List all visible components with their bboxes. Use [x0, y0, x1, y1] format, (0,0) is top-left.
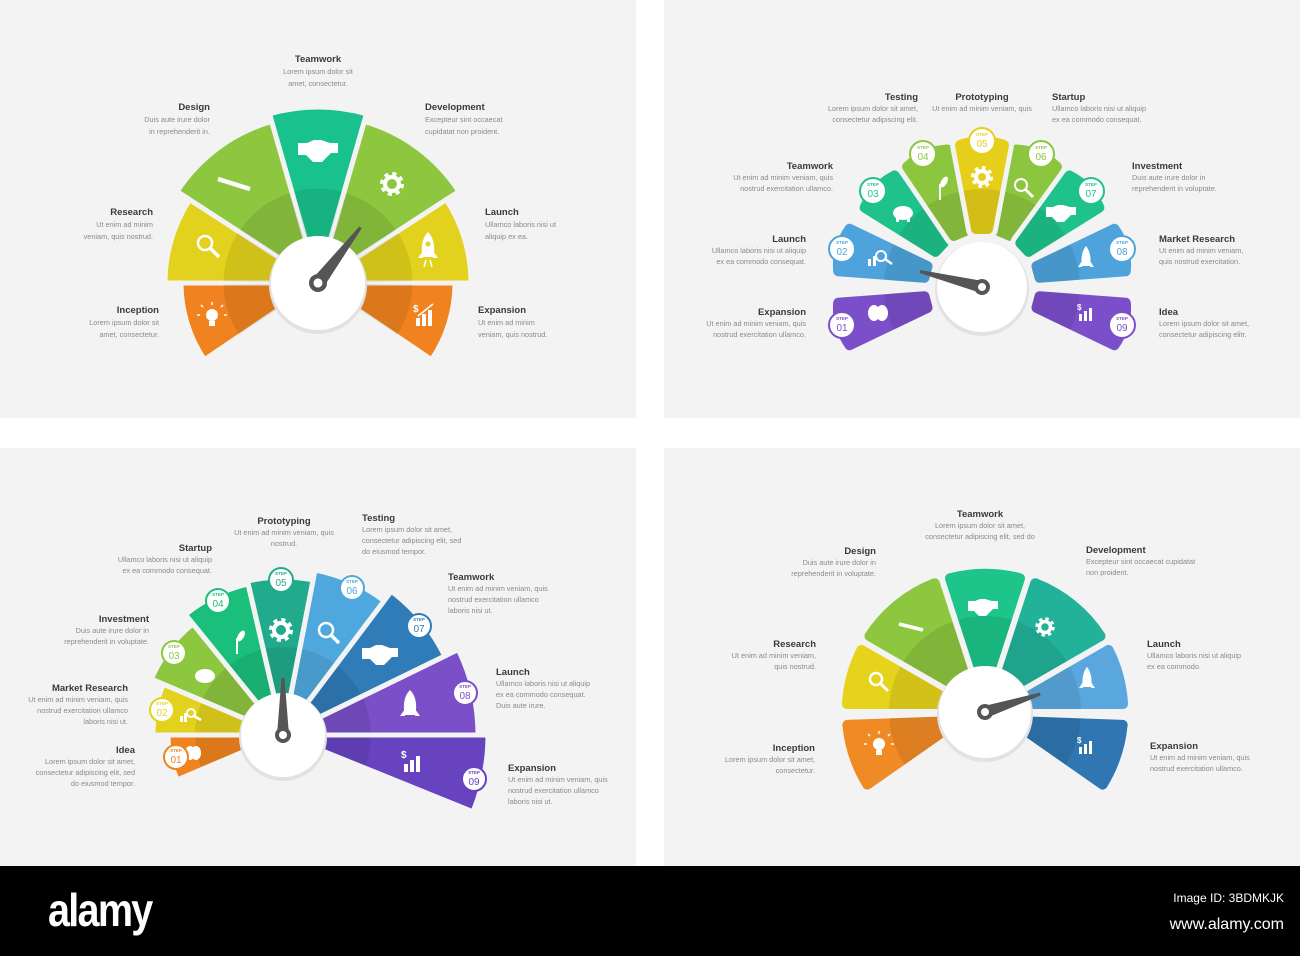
- text: teamwork: Teamwork: [448, 572, 495, 583]
- step badges panel 2: 06: [1035, 152, 1047, 163]
- rounded segments panel 4: [844, 574, 1126, 786]
- text: research: quis nostrud.: [774, 662, 816, 671]
- panel: top-left gauge: [0, 0, 636, 418]
- text: inception: consectetur.: [776, 766, 815, 775]
- text: launch: [485, 207, 556, 241]
- text: market research: Ut enim ad minim veniam, quis: [28, 695, 128, 704]
- text: expansion: [508, 763, 608, 806]
- text: launch: [496, 667, 590, 710]
- step badges panel 3: 05: [275, 578, 287, 589]
- text: idea: consectetur adipiscing elit, sed: [36, 768, 135, 777]
- step badges panel 2: 02: [836, 247, 848, 258]
- hub panel 3: [239, 693, 327, 781]
- icons panel 4: [864, 599, 1095, 755]
- needle panel 3: [275, 678, 291, 743]
- text: research: veniam, quis nostrud.: [84, 232, 153, 241]
- icon: rocket: [400, 690, 420, 716]
- text: testing: consectetur adipiscing elit.: [832, 115, 918, 124]
- text: expansion: Ut enim ad minim veniam, quis: [706, 319, 806, 328]
- text: teamwork: [925, 509, 1035, 541]
- icon: rocket: [418, 232, 438, 267]
- icons panel 3: [180, 620, 420, 772]
- text: expansion: Expansion: [508, 763, 556, 774]
- text: testing: do eiusmod tempor.: [362, 547, 426, 556]
- text: development: cupidatat non proident.: [425, 127, 499, 136]
- text: launch: Duis aute irure.: [496, 701, 545, 710]
- text: prototyping: Prototyping: [955, 92, 1009, 103]
- text: expansion: [1150, 741, 1250, 773]
- icon: pencil: [899, 624, 923, 630]
- step badges panel 3: STEP: [212, 592, 224, 597]
- footer bar: [0, 866, 1300, 956]
- needle panel 4: [975, 686, 1043, 722]
- text: idea: Lorem ipsum dolor sit amet,: [1159, 319, 1249, 328]
- text: development: Development: [425, 102, 485, 113]
- text: research: [84, 207, 153, 241]
- text: launch: [1147, 639, 1241, 671]
- text: design: Duis aute irure dolor in: [803, 558, 876, 567]
- text: startup: Ullamco laboris nisi ut aliquip: [1052, 104, 1146, 113]
- step badges panel 3: 09: [468, 777, 480, 788]
- text: inception: Inception: [773, 743, 815, 754]
- step badges panel 2: STEP: [867, 182, 879, 187]
- text: prototyping: Prototyping: [257, 516, 311, 527]
- text: teamwork: Teamwork: [295, 54, 342, 65]
- text: research: Research: [773, 639, 816, 650]
- step badges panel 2: 03: [867, 189, 879, 200]
- step badges panel 2: STEP: [1035, 145, 1047, 150]
- text: market research: Ut enim ad minim veniam,: [1159, 246, 1243, 255]
- step badges panel 2: [829, 128, 1135, 338]
- text: expansion: Expansion: [478, 305, 526, 316]
- text: testing: [828, 92, 918, 124]
- icon: brain: [868, 305, 888, 321]
- panel: top-right petals: [664, 0, 1300, 418]
- icon: bulb: [864, 731, 894, 755]
- text: launch: Ullamco laboris nisi ut aliquip: [1147, 651, 1241, 660]
- text: teamwork: nostrud exercitation ullamco.: [740, 184, 833, 193]
- text: startup: Ullamco laboris nisi ut aliquip: [118, 555, 212, 564]
- text: startup: Startup: [179, 543, 212, 554]
- step badges panel 3: 01: [170, 755, 182, 766]
- icon: chart: [1077, 303, 1092, 321]
- text: expansion: Expansion: [1150, 741, 1198, 752]
- text: development: [1086, 545, 1195, 577]
- icon: rocket: [1079, 667, 1095, 688]
- text: expansion: nostrud exercitation ullamco: [508, 786, 599, 795]
- step badges panel 2: STEP: [836, 316, 848, 321]
- icons panel 2: [868, 168, 1094, 321]
- text: startup: [118, 543, 212, 575]
- text: testing: [362, 513, 461, 556]
- step badges panel 3: STEP: [168, 644, 180, 649]
- icon: magnifier: [198, 236, 219, 257]
- text: design: Design: [178, 102, 210, 113]
- step badges panel 2: STEP: [836, 240, 848, 245]
- icon: rocket: [1078, 246, 1094, 267]
- text: prototyping: Ut enim ad minim veniam, quis: [932, 104, 1032, 113]
- text: idea: do eiusmod tempor.: [71, 779, 135, 788]
- text: launch: Ullamco laboris nisi ut: [485, 220, 556, 229]
- step badges panel 2: 07: [1085, 189, 1097, 200]
- text: market research: laboris nisi ut.: [83, 717, 128, 726]
- hub panel 2: [935, 242, 1029, 336]
- text: teamwork: Lorem ipsum dolor sit amet,: [935, 521, 1025, 530]
- text: development: [425, 102, 502, 136]
- text: launch: ex ea commodo.: [1147, 662, 1201, 671]
- text: investment: [64, 614, 150, 646]
- step badges panel 3: 02: [156, 708, 168, 719]
- text: testing: Testing: [362, 513, 395, 524]
- step badges panel 3: STEP: [275, 571, 287, 576]
- step badges panel 3: STEP: [346, 579, 358, 584]
- text: expansion: nostrud exercitation ullamco.: [1150, 764, 1243, 773]
- step badges panel 3: 06: [346, 586, 358, 597]
- text: prototyping: nostrud.: [271, 539, 297, 548]
- text: idea: Lorem ipsum dolor sit amet,: [45, 757, 135, 766]
- icon: handshake: [1046, 205, 1076, 222]
- needle panel 2: [918, 264, 992, 297]
- text: startup: ex ea commodo consequat.: [122, 566, 212, 575]
- text: testing: Testing: [885, 92, 918, 103]
- text: market research: Market Research: [1159, 234, 1235, 245]
- text: teamwork: Teamwork: [787, 161, 834, 172]
- icon: magnifier check: [1015, 179, 1033, 197]
- text: investment: [1132, 161, 1217, 193]
- text: launch: Ullamco laboris nisi ut aliquip: [712, 246, 806, 255]
- icon: handshake: [298, 140, 338, 162]
- icon: brain: [185, 746, 201, 760]
- text: launch: ex ea commodo consequat.: [716, 257, 806, 266]
- text: research: [732, 639, 816, 671]
- step badges panel 3: 07: [413, 624, 425, 635]
- icon: bulb: [197, 302, 227, 326]
- text: market research: [28, 683, 128, 726]
- icon: market research: [868, 251, 892, 266]
- fan segments panel 3: [148, 566, 492, 812]
- step badges panel 3: STEP: [459, 684, 471, 689]
- text: website: www.alamy.com: [1169, 916, 1284, 933]
- text: investment: reprehenderit in voluptate.: [1132, 184, 1217, 193]
- step badges panel 2: STEP: [976, 132, 988, 137]
- needle panel 1: [305, 222, 368, 296]
- step badges panel 2: 09: [1116, 323, 1128, 334]
- icon: chart: [401, 750, 420, 772]
- text: development: non proident.: [1086, 568, 1129, 577]
- icon: gear: [382, 174, 402, 194]
- text: prototyping: Ut enim ad minim veniam, quis: [234, 528, 334, 537]
- text: launch: Launch: [485, 207, 519, 218]
- text: design: [144, 102, 211, 136]
- icon: chart: [1077, 736, 1092, 754]
- text: market research: [1159, 234, 1243, 266]
- text: expansion: nostrud exercitation ullamco.: [713, 330, 806, 339]
- text: investment: Duis aute irure dolor in: [1132, 173, 1205, 182]
- text: launch: Launch: [496, 667, 530, 678]
- text: testing: Lorem ipsum dolor sit amet,: [828, 104, 918, 113]
- text: testing: Lorem ipsum dolor sit amet,: [362, 525, 452, 534]
- step badges panel 2: STEP: [1116, 240, 1128, 245]
- text: teamwork: Ut enim ad minim veniam, quis: [733, 173, 833, 182]
- icon: handshake: [362, 645, 398, 665]
- text: design: reprehenderit in voluptate.: [791, 569, 876, 578]
- text: teamwork: Ut enim ad minim veniam, quis: [448, 584, 548, 593]
- icon: magnifier: [870, 673, 888, 691]
- text: testing: consectetur adipiscing elit, sed: [362, 536, 461, 545]
- text: design: in reprehenderit in.: [149, 127, 210, 136]
- text: idea: [1159, 307, 1249, 339]
- icon: gear: [973, 168, 991, 186]
- text: market research: nostrud exercitation ullamco: [37, 706, 128, 715]
- text: launch: aliquip ex ea.: [485, 232, 528, 241]
- text: market research: Market Research: [52, 683, 128, 694]
- step badges panel 2: 01: [836, 323, 848, 334]
- text: design: Design: [844, 546, 876, 557]
- icon: gear: [271, 620, 291, 640]
- step badges panel 3: STEP: [468, 770, 480, 775]
- text: idea: Idea: [1159, 307, 1179, 318]
- step badges panel 2: 05: [976, 139, 988, 150]
- panel: bottom-left fan: [0, 448, 636, 866]
- text: startup: Startup: [1052, 92, 1085, 103]
- text: launch: Launch: [1147, 639, 1181, 650]
- icon: chart: $: [401, 750, 407, 761]
- icon: pencil: [218, 179, 250, 189]
- text: startup: ex ea commodo consequat.: [1052, 115, 1142, 124]
- text: teamwork: [283, 54, 353, 88]
- gauge segments panel 1: [159, 107, 477, 361]
- icon: plant: [938, 175, 950, 200]
- step badges panel 2: STEP: [1116, 316, 1128, 321]
- text: expansion: [706, 307, 806, 339]
- icon: chart: $: [413, 304, 419, 315]
- text: investment: Investment: [1132, 161, 1183, 172]
- text: development: Excepteur sint occaecat cupidatat: [1086, 557, 1195, 566]
- step badges panel 3: STEP: [170, 748, 182, 753]
- text: inception: Lorem ipsum dolor sit: [89, 318, 159, 327]
- text: research: Research: [110, 207, 153, 218]
- step badges panel 3: 08: [459, 691, 471, 702]
- text: teamwork: amet, consectetur.: [288, 79, 348, 88]
- text: research: Ut enim ad minim: [96, 220, 153, 229]
- hub panel 4: [937, 666, 1033, 762]
- text: investment: Investment: [99, 614, 150, 625]
- text: investment: reprehenderit in voluptate.: [64, 637, 149, 646]
- step badges panel 2: STEP: [917, 145, 929, 150]
- petals panel 2: [834, 141, 1130, 346]
- text: development: Development: [1086, 545, 1146, 556]
- text: development: Excepteur sint occaecat: [425, 115, 502, 124]
- text: launch: ex ea commodo consequat.: [496, 690, 586, 699]
- text: launch: [712, 234, 806, 266]
- step badges panel 3: 03: [168, 651, 180, 662]
- text: expansion: [478, 305, 547, 339]
- icon: piggy: [195, 669, 215, 683]
- text: teamwork: nostrud exercitation ullamco: [448, 595, 539, 604]
- panel: bottom-right rounded gauge: [664, 448, 1300, 866]
- text: startup: [1052, 92, 1146, 124]
- text: image id: Image ID: 3BDMKJK: [1173, 891, 1284, 905]
- text: investment: Duis aute irure dolor in: [76, 626, 149, 635]
- icon: handshake: [968, 599, 998, 616]
- text: research: Ut enim ad minim veniam,: [732, 651, 816, 660]
- step badges panel 2: 08: [1116, 247, 1128, 258]
- text: teamwork: Teamwork: [957, 509, 1004, 520]
- step badges panel 3: [150, 568, 486, 791]
- text: expansion: Ut enim ad minim veniam, quis: [508, 775, 608, 784]
- icon: plant: [235, 629, 247, 654]
- icon: chart: $: [1077, 303, 1082, 312]
- text: idea: Idea: [116, 745, 136, 756]
- step badges panel 2: STEP: [1085, 182, 1097, 187]
- text: idea: consectetur adipiscing elitr.: [1159, 330, 1247, 339]
- step badges panel 3: 04: [212, 599, 224, 610]
- text: expansion: Ut enim ad minim: [478, 318, 535, 327]
- icon: market research: [180, 709, 201, 722]
- text: launch: Launch: [772, 234, 806, 245]
- icon: gear: [1037, 619, 1053, 635]
- text: inception: Inception: [117, 305, 159, 316]
- text: prototyping: [932, 92, 1032, 113]
- text: inception: [725, 743, 815, 775]
- text: teamwork: laboris nisi ut.: [448, 606, 493, 615]
- text: design: [791, 546, 876, 578]
- hub panel 1: [269, 236, 367, 334]
- icon: magnifier check: [319, 623, 339, 643]
- icon: piggy: [893, 206, 913, 222]
- step badges panel 2: 04: [917, 152, 929, 163]
- text: teamwork: [733, 161, 834, 193]
- text: expansion: laboris nisi ut.: [508, 797, 553, 806]
- text: expansion: veniam, quis nostrud.: [478, 330, 547, 339]
- step badges panel 3: STEP: [413, 617, 425, 622]
- text: teamwork: Lorem ipsum dolor sit: [283, 67, 353, 76]
- logo: alamy: alamy: [48, 885, 153, 937]
- text: inception: [89, 305, 159, 339]
- text: teamwork: [448, 572, 548, 615]
- text: market research: quis nostrud exercitation.: [1159, 257, 1240, 266]
- icon: chart: $: [1077, 736, 1082, 745]
- text: design: Duis aute irure dolor: [144, 115, 211, 124]
- text: prototyping: [234, 516, 334, 548]
- text: launch: Ullamco laboris nisi ut aliquip: [496, 679, 590, 688]
- text: inception: amet, consectetur.: [99, 330, 159, 339]
- step badges panel 3: STEP: [156, 701, 168, 706]
- text: teamwork: consectetur adipiscing elit, sed do: [925, 532, 1035, 541]
- text: expansion: Ut enim ad minim veniam, quis: [1150, 753, 1250, 762]
- text: expansion: Expansion: [758, 307, 806, 318]
- icon: chart: [413, 304, 433, 326]
- text: inception: Lorem ipsum dolor sit amet,: [725, 755, 815, 764]
- text: idea: [36, 745, 136, 788]
